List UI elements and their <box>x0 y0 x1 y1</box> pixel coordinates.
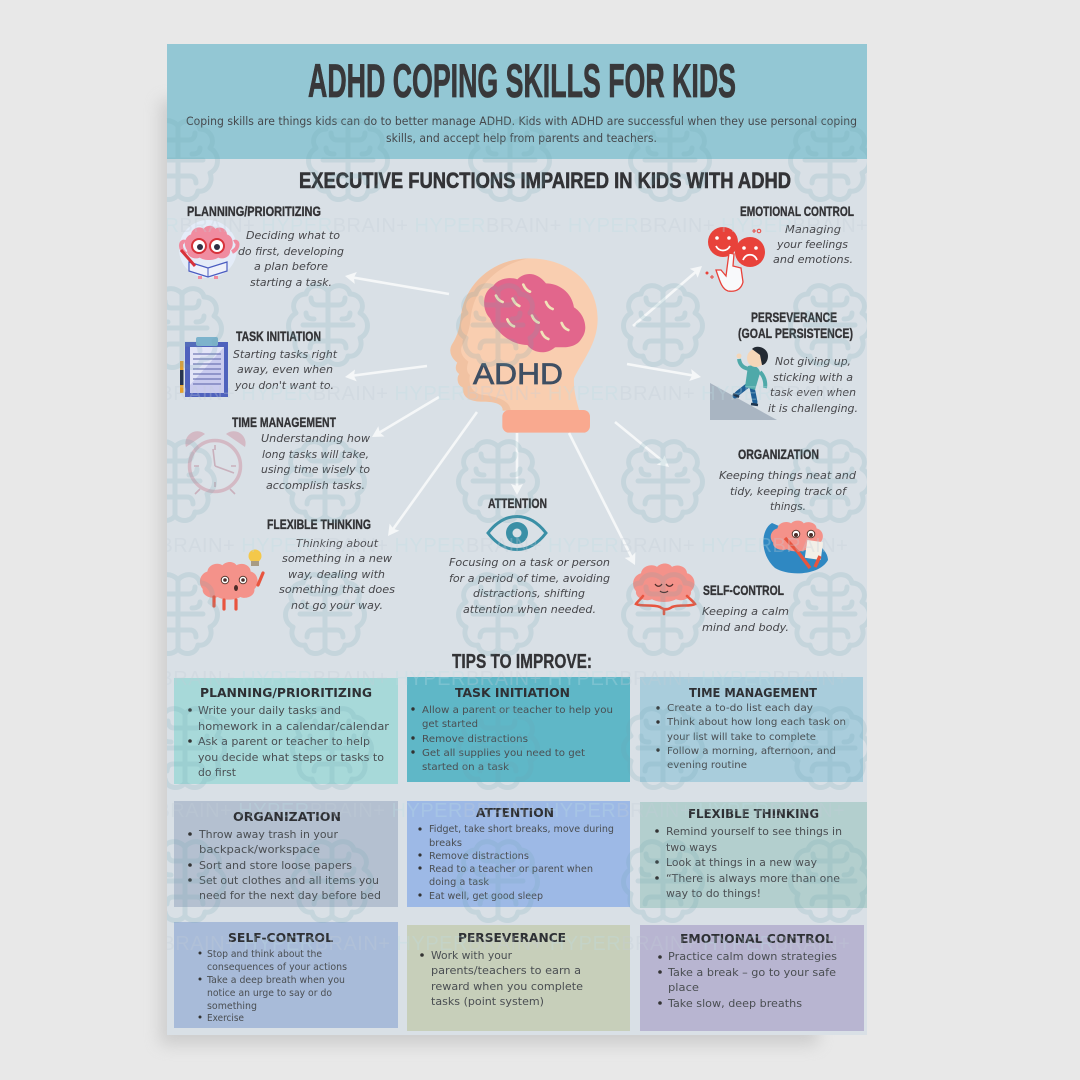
tip panel: flexible thinking: “There is always more than one <box>666 872 840 885</box>
description <box>449 556 610 616</box>
description: for a period of time, avoiding <box>449 572 610 585</box>
tip panel: organization: backpack/workspace <box>199 843 320 856</box>
icon: brain with glasses and book <box>179 220 238 279</box>
description: do first, developing <box>238 245 344 258</box>
description <box>279 537 395 612</box>
tip panel: perseverance: Work with your <box>431 949 512 962</box>
description: Focusing on a task or person <box>449 556 610 569</box>
tip panel: attention <box>407 801 630 907</box>
item: time management: TIME MANAGEMENT <box>232 414 336 430</box>
icon: meditating brain <box>633 564 695 614</box>
description: things. <box>770 500 806 513</box>
brain in head <box>484 274 585 352</box>
item: self-control: SELF-CONTROL <box>703 582 784 598</box>
tip panel: task initiation: Allow a parent or teacher to help you <box>422 705 613 716</box>
tip panel: task initiation: started on a task <box>422 762 509 773</box>
tip panel: flexible thinking <box>640 802 867 908</box>
tip panel: self-control: something <box>207 1001 257 1012</box>
description: Keeping things neat and <box>719 469 857 482</box>
item: attention: ATTENTION <box>488 495 547 511</box>
item: organization <box>719 446 857 573</box>
tip panel: emotional control <box>640 925 864 1031</box>
tip panel: planning/prioritizing: PLANNING/PRIORITIZING <box>200 685 372 700</box>
tip panel: emotional control: Practice calm down strategies <box>668 950 837 963</box>
watermark overlay: HYPERBRAIN+ HYPERBRAIN+ HYPERBRAIN+ HYPERBRAIN+ HYPERBRAIN+ <box>85 800 845 822</box>
tip panel: organization: ORGANIZATION <box>233 809 341 824</box>
description: distractions, shifting <box>473 587 585 600</box>
tip panel: planning/prioritizing: you decide what steps or tasks to <box>198 751 384 764</box>
tip panel: planning/prioritizing: Write your daily tasks and <box>198 704 341 717</box>
central head icon <box>450 258 598 433</box>
description <box>233 348 338 392</box>
description: away, even when <box>237 363 333 376</box>
tip panel: attention: ATTENTION <box>476 805 554 820</box>
description: attention when needed. <box>463 603 596 616</box>
description <box>261 432 370 492</box>
arrow: to organization <box>615 422 673 472</box>
watermark overlay: HYPERBRAIN+ HYPERBRAIN+ HYPERBRAIN+ HYPERBRAIN+ HYPERBRAIN+ <box>90 933 850 955</box>
tip panel: attention: doing a task <box>429 877 489 888</box>
watermark overlay: HYPERBRAIN+ HYPERBRAIN+ HYPERBRAIN+ HYPERBRAIN+ HYPERBRAIN+ <box>88 383 848 405</box>
tip panel: self-control: Exercise <box>207 1013 244 1024</box>
title: ADHD COPING SKILLS FOR KIDS <box>308 54 736 107</box>
item: emotional control <box>706 203 854 291</box>
tip panel: emotional control: Take slow, deep breaths <box>667 997 802 1010</box>
tip panel: organization: Sort and store loose papers <box>199 859 352 872</box>
tip panel: perseverance: tasks (point system) <box>431 995 544 1008</box>
head silhouette <box>450 258 598 433</box>
tip panel: self-control <box>174 922 398 1028</box>
tip panel: task initiation <box>407 677 630 782</box>
description: Understanding how <box>261 432 370 445</box>
description: a plan before <box>254 260 328 273</box>
tip panel: organization: Throw away trash in your <box>198 828 338 841</box>
description: Keeping a calm <box>702 605 789 618</box>
intro text <box>186 114 857 145</box>
arrow: to time management <box>369 397 439 442</box>
tip panel: time management: Think about how long each task on <box>666 717 846 728</box>
description: something that does <box>279 583 395 596</box>
description: your feelings <box>776 238 848 251</box>
item: planning/prioritizing: PLANNING/PRIORITIZING <box>187 203 321 219</box>
description: not go your way. <box>291 599 383 612</box>
description: Not giving up, <box>775 355 851 368</box>
tip panel: organization <box>174 801 398 907</box>
tip panel: planning/prioritizing: homework in a calendar/calendar <box>198 720 389 733</box>
item: planning/prioritizing <box>179 203 344 289</box>
tip panel: self-control: Take a deep breath when you <box>206 975 345 986</box>
tip panel: time management: Follow a morning, afternoon, and <box>667 746 836 757</box>
item: perseverance: PERSEVERANCE <box>751 309 837 325</box>
description: tidy, keeping track of <box>730 485 848 498</box>
intro text: Coping skills are things kids can do to better manage ADHD. Kids with ADHD are successful when they use personal coping <box>186 114 857 128</box>
tip panel: planning/prioritizing: do first <box>198 766 237 779</box>
arrow: to task initiation <box>344 366 427 383</box>
item: organization: ORGANIZATION <box>738 446 819 462</box>
tip panel: task initiation: get started <box>422 719 478 730</box>
item: flexible thinking: FLEXIBLE THINKING <box>267 516 371 532</box>
tip panel: flexible thinking: Look at things in a new way <box>666 856 817 869</box>
icon: clipboard <box>180 337 228 397</box>
icon: child climbing slope <box>710 347 777 420</box>
item: time management <box>185 414 370 494</box>
description: Starting tasks right <box>233 348 338 361</box>
tip panel: flexible thinking: Remind yourself to see things in <box>666 825 842 838</box>
poster background <box>167 44 867 1035</box>
watermark overlay: HYPERBRAIN+ HYPERBRAIN+ HYPERBRAIN+ HYPERBRAIN+ HYPERBRAIN+ <box>88 668 848 690</box>
tip panel: self-control: notice an urge to say or do <box>207 988 332 999</box>
description: Deciding what to <box>246 229 340 242</box>
icon: brain on beanbag <box>763 521 828 573</box>
icon: alarm clock <box>185 431 246 494</box>
tip panel: organization: need for the next day before bed <box>199 889 381 902</box>
description: long tasks will take, <box>262 448 369 461</box>
tip panel: flexible thinking: way to do things! <box>666 887 761 900</box>
tip panel: time management <box>640 677 863 782</box>
icon: eye <box>488 516 546 550</box>
description: Thinking about <box>296 537 379 550</box>
arrow: to emotional control <box>633 261 706 326</box>
watermark overlay <box>167 118 867 950</box>
tip panel: perseverance: parents/teachers to earn a <box>431 964 581 977</box>
description: mind and body. <box>702 621 789 634</box>
arrow: to flexible thinking <box>383 412 477 540</box>
arrows from head <box>344 261 706 568</box>
item: task initiation: TASK INITIATION <box>236 328 321 344</box>
description: task even when <box>770 386 856 399</box>
tip panel: time management: TIME MANAGEMENT <box>689 685 817 700</box>
tip panel: task initiation: Remove distractions <box>422 734 528 745</box>
icon: smiley and sad faces with hand <box>706 227 765 291</box>
section heading: executive functions: EXECUTIVE FUNCTIONS IMPAIRED IN KIDS WITH ADHD <box>299 168 791 193</box>
watermark overlay: HYPERBRAIN+ HYPERBRAIN+ HYPERBRAIN+ HYPERBRAIN+ HYPERBRAIN+ <box>88 535 848 557</box>
tip panel: time management: your list will take to complete <box>667 732 816 743</box>
tip panel: attention: Fidget, take short breaks, move during <box>429 824 614 835</box>
arrow: to planning <box>344 270 449 294</box>
arrow: to attention <box>511 433 523 495</box>
description <box>238 229 344 289</box>
tip panel: emotional control: Take a break – go to your safe <box>667 966 836 979</box>
description: starting a task. <box>250 276 332 289</box>
item: task initiation <box>180 328 338 397</box>
description <box>768 355 858 415</box>
watermark overlay: HYPERBRAIN+ HYPERBRAIN+ HYPERBRAIN+ HYPERBRAIN+ HYPERBRAIN+ <box>108 215 868 237</box>
item: perseverance <box>710 309 858 420</box>
description <box>773 223 853 266</box>
tip panel: perseverance: PERSEVERANCE <box>458 930 566 945</box>
tip panel: perseverance <box>407 925 630 1031</box>
tip panel: attention: Read to a teacher or parent when <box>429 864 593 875</box>
tip panel: planning/prioritizing <box>174 678 398 784</box>
head label: ADHD <box>473 358 563 391</box>
item: emotional control: EMOTIONAL CONTROL <box>740 203 854 219</box>
tip panel: time management: evening routine <box>667 760 747 771</box>
tip panel: task initiation: TASK INITIATION <box>455 685 570 700</box>
description: way, dealing with <box>288 568 385 581</box>
item: flexible thinking <box>200 516 395 612</box>
tip panel: task initiation: Get all supplies you need to get <box>422 748 585 759</box>
tip panel: emotional control: EMOTIONAL CONTROL <box>680 931 833 946</box>
tip panel: flexible thinking: two ways <box>666 841 717 854</box>
description: accomplish tasks. <box>266 479 365 492</box>
tip panel: perseverance: reward when you complete <box>431 980 583 993</box>
header band <box>167 44 867 159</box>
item: self-control <box>633 564 789 634</box>
intro text: skills, and accept help from parents and teachers. <box>386 131 657 145</box>
tip panel: flexible thinking: FLEXIBLE THINKING <box>688 806 819 821</box>
tip panel: self-control: Stop and think about the <box>207 949 322 960</box>
description: sticking with a <box>773 371 853 384</box>
arrow: to self-control <box>569 433 640 568</box>
tip panel: emotional control: place <box>668 981 699 994</box>
description: and emotions. <box>773 253 853 266</box>
tip panel: organization: Set out clothes and all items you <box>199 874 379 887</box>
poster shadow <box>160 100 818 1045</box>
tip panel: attention: Remove distractions <box>429 851 529 862</box>
description: Managing <box>785 223 841 236</box>
tip panel: self-control: consequences of your actions <box>207 962 347 973</box>
item: perseverance: (GOAL PERSISTENCE) <box>738 325 853 341</box>
tip panel: planning/prioritizing: Ask a parent or teacher to help <box>198 735 370 748</box>
section heading: tips to improve: TIPS TO IMPROVE: <box>452 650 592 673</box>
description: it is challenging. <box>768 402 858 415</box>
tip panel: attention: breaks <box>429 838 462 849</box>
description: you don't want to. <box>234 379 334 392</box>
description: something in a new <box>282 552 392 565</box>
tip panel: attention: Eat well, get good sleep <box>429 891 543 902</box>
icon: brain with light bulb <box>200 550 263 609</box>
item: attention <box>449 495 610 616</box>
tip panel: time management: Create a to-do list each day <box>667 703 813 714</box>
collar <box>502 410 590 433</box>
tip panel: self-control: SELF-CONTROL <box>228 930 333 945</box>
description <box>702 605 789 634</box>
description <box>719 469 857 513</box>
arrow: to perseverance <box>627 364 702 383</box>
description: using time wisely to <box>261 463 370 476</box>
